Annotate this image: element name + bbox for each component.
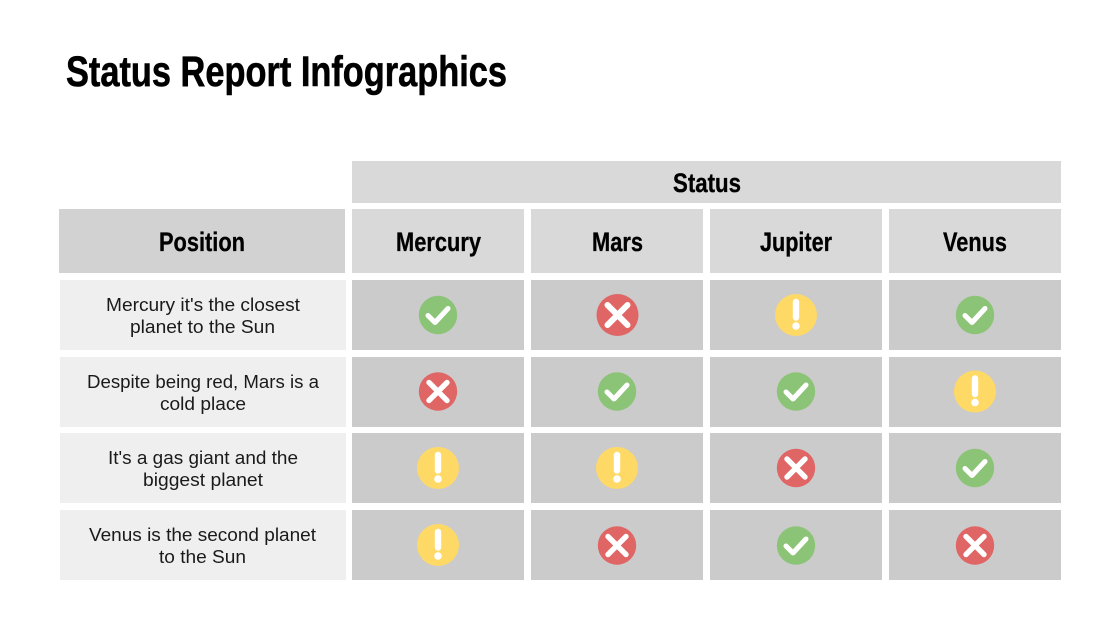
row: Mars description: Despite being red, Mars is a	[87, 372, 320, 392]
icon: check	[956, 449, 994, 487]
header: Position	[59, 209, 345, 273]
row: Mercury description	[60, 280, 346, 350]
icon: check	[419, 296, 457, 334]
row 4 status cells	[352, 510, 1061, 580]
icon: cross	[598, 526, 636, 565]
icon: check	[956, 296, 994, 334]
icon: cross	[956, 526, 994, 565]
row: Jupiter description: It's a gas giant and the	[108, 448, 298, 468]
row: Jupiter description: biggest planet	[143, 470, 263, 490]
header: Venus	[889, 209, 1061, 273]
icon: check	[777, 372, 815, 411]
icon: check	[598, 372, 636, 411]
row: Venus description: to the Sun	[159, 547, 246, 567]
icon: warning	[596, 447, 638, 489]
row: Mars description: cold place	[160, 394, 246, 414]
header: Mercury	[352, 209, 524, 273]
icon: warning	[417, 524, 459, 566]
header: Position: Position	[159, 227, 245, 257]
row 2 status cells	[352, 357, 1061, 427]
title: Status Report Infographics	[66, 49, 507, 96]
header: Jupiter: Jupiter	[760, 227, 832, 257]
icon: cross	[777, 449, 815, 487]
table: status report	[59, 161, 1061, 580]
header: Status: Status	[673, 168, 741, 198]
row 3 status cells	[352, 433, 1061, 503]
header: Jupiter	[710, 209, 882, 273]
icon: warning	[775, 294, 817, 336]
icon: warning	[954, 370, 996, 412]
row: Jupiter description	[60, 433, 346, 503]
header: Venus: Venus	[943, 227, 1007, 257]
icon: check	[777, 526, 815, 565]
header: Mercury: Mercury	[396, 227, 481, 257]
icon: cross	[596, 294, 638, 336]
icon: warning	[417, 447, 459, 489]
header: Status	[352, 161, 1061, 203]
row 1 status cells	[352, 280, 1061, 350]
row: Mercury description: Mercury it's the closest	[106, 295, 300, 315]
header: Mars: Mars	[592, 227, 643, 257]
icon: cross	[419, 372, 457, 411]
row: Mars description	[60, 357, 346, 427]
row: Venus description	[60, 510, 346, 580]
row: Mercury description: planet to the Sun	[130, 317, 275, 337]
row: Venus description: Venus is the second planet	[89, 525, 316, 545]
header: Mars	[531, 209, 703, 273]
